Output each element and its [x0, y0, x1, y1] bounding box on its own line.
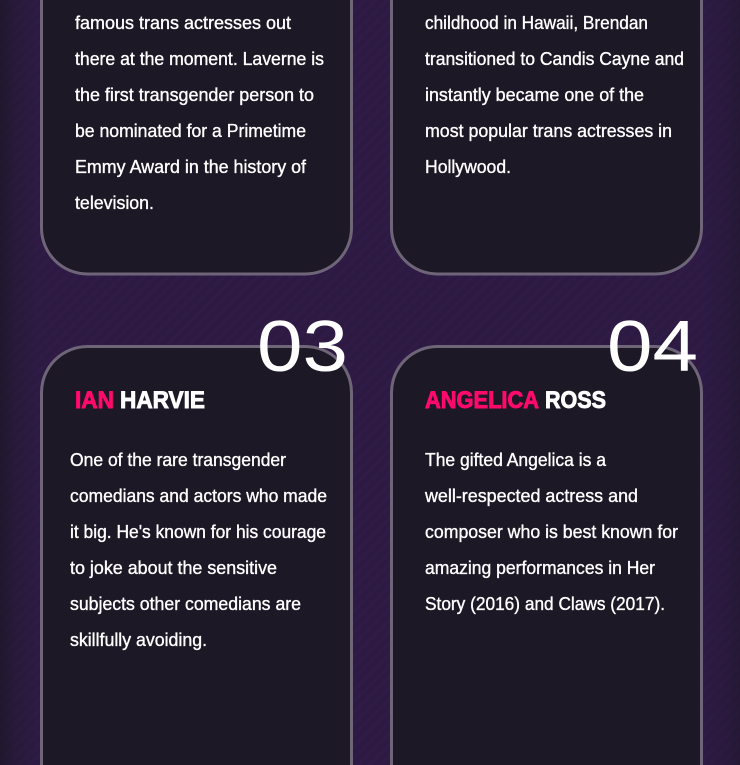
text: Laverne description: famous trans actresses out: [75, 13, 291, 33]
text: Ian description: it big. He's known for his courage: [70, 522, 326, 542]
panel: Laverne: [42, 0, 352, 274]
number 04: 04: [607, 307, 698, 387]
text: Candis description: instantly became one of the: [425, 85, 644, 105]
number 03: 03: [257, 307, 348, 387]
text: Laverne description: there at the moment. Laverne is: [75, 49, 324, 69]
heading: Angelica Ross: ROSS: [545, 387, 606, 414]
text: Candis description: childhood in Hawaii, Brendan: [425, 13, 648, 33]
text: Ian description: to joke about the sensitive: [70, 558, 277, 578]
heading: Ian Harvie: [75, 387, 205, 414]
heading: Ian Harvie: IAN: [75, 387, 114, 414]
text: Angelica description: well-respected actress and: [424, 486, 638, 506]
text: Laverne description: Emmy Award in the history of: [75, 157, 307, 177]
text: Angelica description: amazing performances in Her: [425, 558, 655, 578]
text: Ian description: subjects other comedians are: [70, 594, 301, 614]
text: Candis description: Hollywood.: [425, 157, 511, 177]
text: Candis description: most popular trans actresses in: [425, 121, 672, 141]
panel: Candis: [392, 0, 702, 274]
text: Angelica description: composer who is best known for: [425, 522, 678, 542]
text: Ian description: [70, 450, 327, 650]
text: Ian description: skillfully avoiding.: [70, 630, 207, 650]
panel: Ian Harvie: [42, 307, 352, 765]
text: Angelica description: The gifted Angelica is a: [425, 450, 607, 470]
text: Laverne description: be nominated for a Primetime: [75, 121, 306, 141]
text: Laverne description: [75, 13, 324, 213]
text: Laverne description: the first transgender person to: [75, 85, 314, 105]
text: Angelica description: [424, 450, 678, 614]
panel: Angelica Ross: [392, 307, 702, 765]
text: Candis description: transitioned to Candis Cayne and: [425, 49, 684, 69]
heading: Ian Harvie: HARVIE: [120, 387, 205, 414]
text: Laverne description: television.: [75, 193, 154, 213]
text: Ian description: comedians and actors who made: [70, 486, 327, 506]
text: Angelica description: Story (2016) and Claws (2017).: [425, 594, 665, 614]
text: Candis description: [425, 13, 684, 177]
heading: Angelica Ross: ANGELICA: [425, 387, 539, 414]
text: Ian description: One of the rare transgender: [70, 450, 286, 470]
